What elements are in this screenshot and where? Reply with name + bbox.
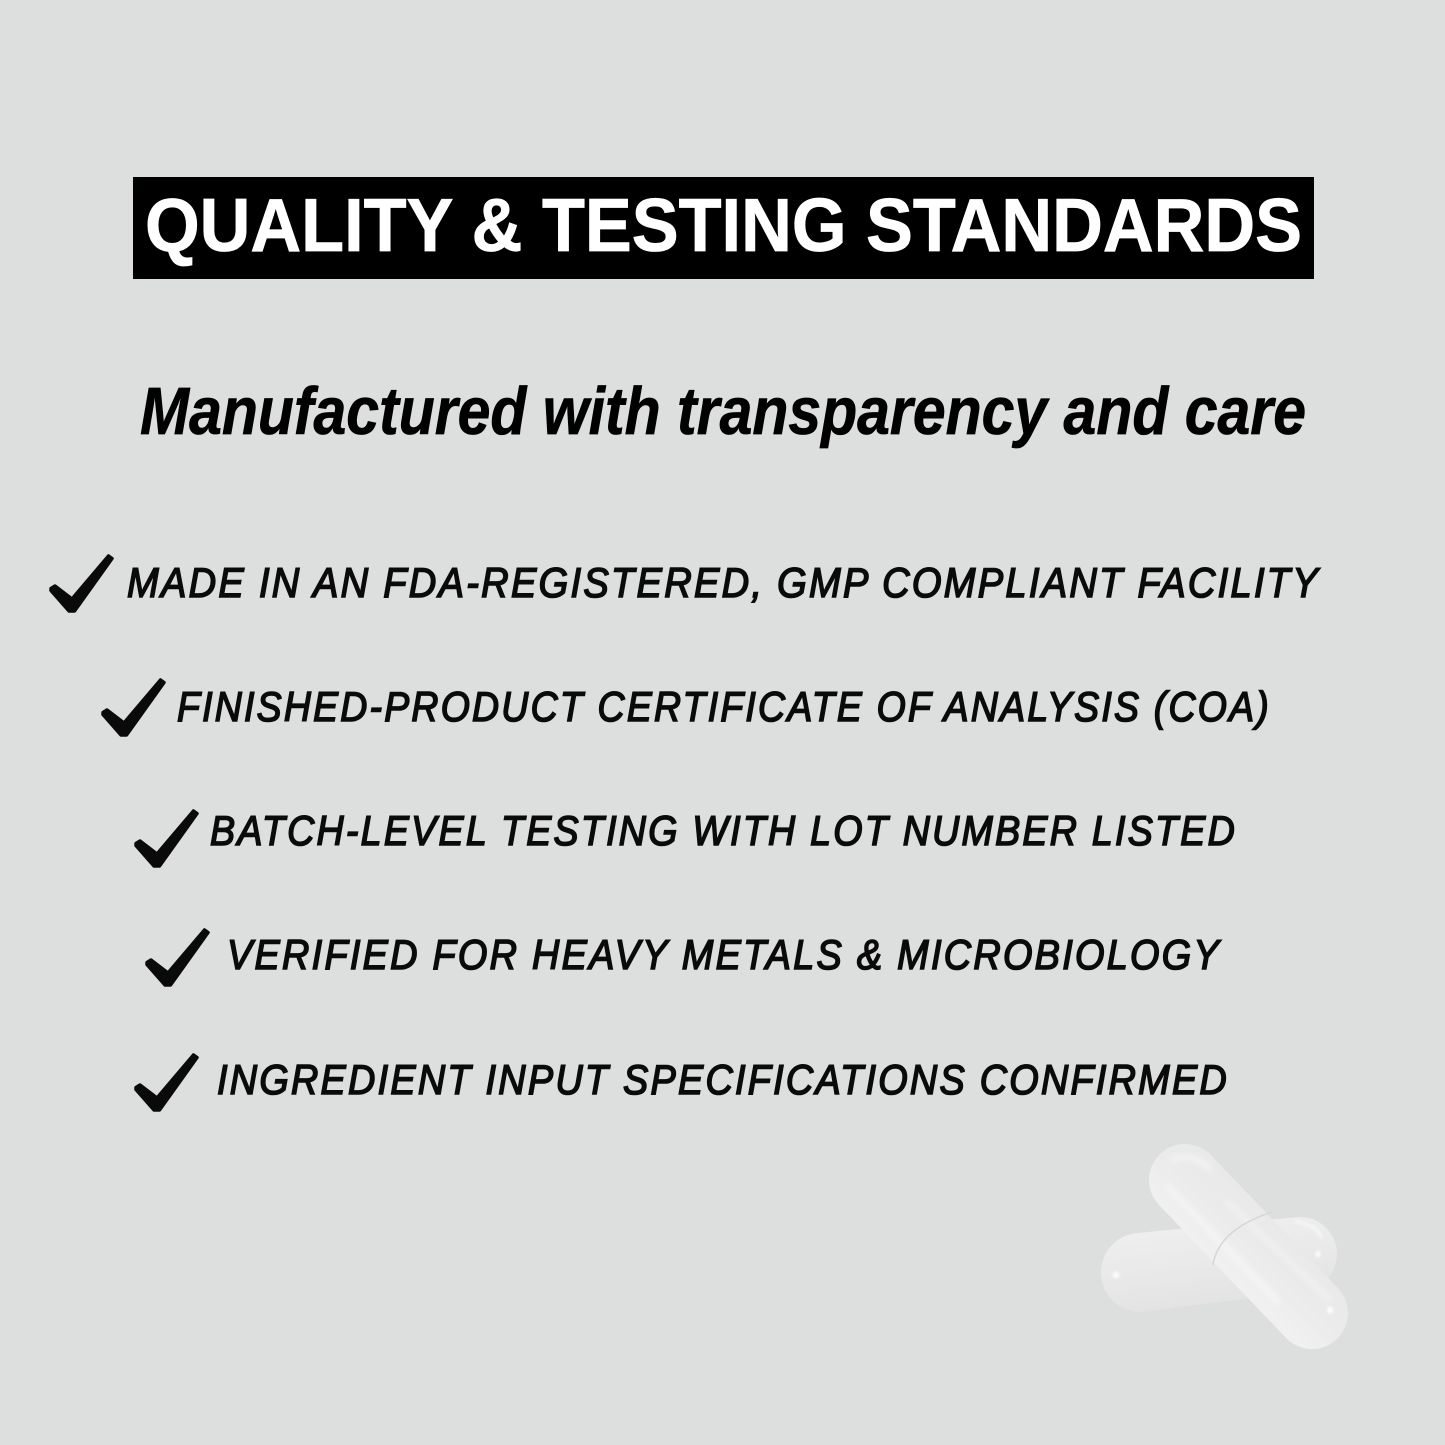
checklist — [51, 556, 1320, 1110]
title banner: QUALITY & TESTING STANDARDS — [145, 183, 1302, 267]
item 4: VERIFIED FOR HEAVY METALS & MICROBIOLOGY — [227, 931, 1221, 978]
item 3 — [136, 807, 1237, 866]
capsules illustration — [1101, 1157, 1337, 1314]
item 1: MADE IN AN FDA-REGISTERED, GMP COMPLIANT FACILITY — [127, 559, 1320, 606]
rear capsule — [1101, 1217, 1337, 1312]
item 5: INGREDIENT INPUT SPECIFICATIONS CONFIRMED — [217, 1056, 1229, 1103]
front capsule — [1168, 1157, 1333, 1314]
capsule seam — [1213, 1212, 1272, 1265]
item 3: BATCH-LEVEL TESTING WITH LOT NUMBER LISTED — [210, 807, 1237, 854]
subtitle: Manufactured with transparency and care — [140, 374, 1306, 449]
item 2: FINISHED-PRODUCT CERTIFICATE OF ANALYSIS (COA) — [177, 683, 1271, 730]
